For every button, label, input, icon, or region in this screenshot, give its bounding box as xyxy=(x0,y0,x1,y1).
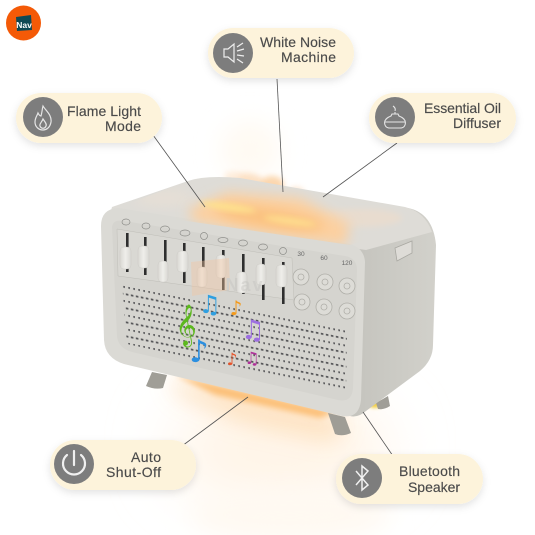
timer buttons: 120 xyxy=(342,260,353,267)
watermark xyxy=(191,258,265,296)
callout: flame light mode: Mode xyxy=(105,118,141,134)
side panel xyxy=(350,208,436,416)
side handle xyxy=(395,241,412,261)
music notes: ♪ xyxy=(227,350,237,370)
background glow xyxy=(170,120,390,535)
callout: auto shut-off: Auto xyxy=(131,449,161,465)
music notes xyxy=(175,290,265,370)
icon: speaker with waves xyxy=(224,43,244,63)
icon: diffuser xyxy=(385,106,405,128)
music notes: ♫ xyxy=(199,290,221,319)
icon: power xyxy=(63,451,85,474)
icon: bluetooth xyxy=(356,466,368,490)
front face xyxy=(101,208,365,416)
callout: bluetooth speaker: Speaker xyxy=(408,479,460,495)
callout: bluetooth speaker xyxy=(336,454,483,504)
timer buttons: 60 xyxy=(320,255,328,262)
device legs xyxy=(146,372,390,435)
callout: white noise machine: Machine xyxy=(281,49,336,65)
flames above device xyxy=(224,171,304,197)
timer buttons xyxy=(293,251,355,319)
under-device orange glow xyxy=(168,375,382,440)
callout: white noise machine xyxy=(208,28,354,78)
speaker grille xyxy=(122,286,347,388)
callout: flame light mode: Flame Light xyxy=(67,103,141,119)
slider panel xyxy=(117,229,294,304)
callout: auto shut-off xyxy=(50,440,196,490)
timer buttons: 30 xyxy=(297,251,305,258)
watermark: Nav xyxy=(225,275,265,295)
music notes: ♪ xyxy=(189,334,209,370)
top control icons row xyxy=(122,219,286,254)
music notes: ♫ xyxy=(244,349,260,369)
music notes: 𝄞 xyxy=(175,304,197,347)
leader lines xyxy=(153,79,397,456)
callout: bluetooth speaker: Bluetooth xyxy=(399,463,460,479)
lid top xyxy=(110,177,432,250)
device body xyxy=(101,177,436,416)
front recess xyxy=(112,221,357,400)
music notes: ♫ xyxy=(241,315,265,346)
logo badge xyxy=(6,6,41,40)
slider slots xyxy=(126,233,285,304)
callout: essential oil diffuser: Essential Oil xyxy=(424,100,501,116)
callout: essential oil diffuser xyxy=(369,93,516,143)
callout: essential oil diffuser: Diffuser xyxy=(453,115,501,131)
lid flame light xyxy=(186,186,396,244)
icon: flame xyxy=(35,106,51,130)
logo badge: Nav xyxy=(16,20,32,30)
callout: white noise machine: White Noise xyxy=(260,34,336,50)
callout: auto shut-off: Shut-Off xyxy=(106,464,161,480)
slider thumbs xyxy=(120,246,287,293)
callout: flame light mode xyxy=(16,93,162,143)
music notes: ♪ xyxy=(230,296,242,320)
